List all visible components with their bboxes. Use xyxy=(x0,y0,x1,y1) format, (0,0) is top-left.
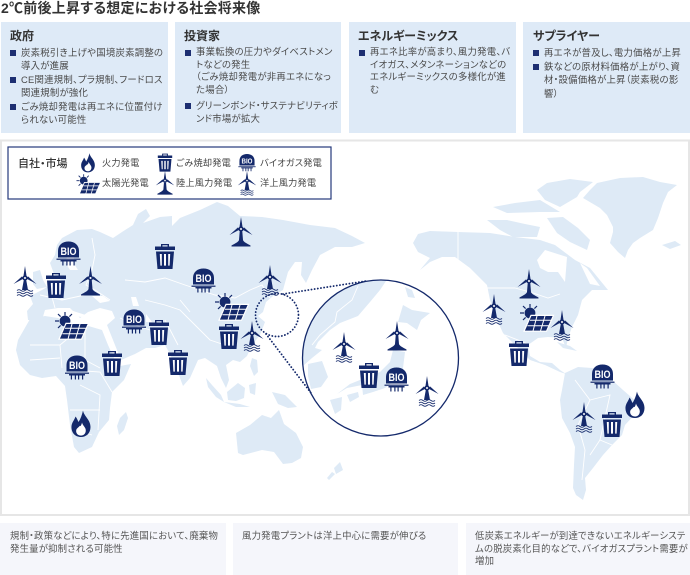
text: waste power xyxy=(21,100,163,127)
icon: waste, China xyxy=(219,324,239,349)
Honshu xyxy=(337,350,405,395)
text: divestment: た場合） xyxy=(196,84,229,95)
map frame xyxy=(1,140,689,515)
New Zealand xyxy=(327,462,343,480)
text: divestment xyxy=(196,46,333,97)
South America xyxy=(560,367,638,500)
Australia xyxy=(236,410,303,464)
text: waste note: 規制・政策などにより、特に先進国において、廃棄物 xyxy=(10,530,218,541)
icon: biogas, West Africa xyxy=(65,356,89,380)
text: biogas note xyxy=(475,530,688,566)
legend: offshore wind: 洋上風力発電 xyxy=(260,177,316,188)
icon: waste, Mexico xyxy=(509,341,529,366)
zoom circle: Japan xyxy=(303,280,430,414)
heading: investors: 投資家 xyxy=(184,29,220,43)
icon: onshore wind, Siberia xyxy=(230,217,252,246)
icon: offshore wind, East China Sea xyxy=(240,321,264,351)
icon: onshore wind, USA xyxy=(518,269,540,298)
text: green bond xyxy=(196,99,338,126)
icon: onshore wind, Japan xyxy=(386,321,408,350)
text: renewable ratio: 再エネ比率が高まり、風力発電、バ xyxy=(370,46,510,57)
Sakhalin xyxy=(405,287,415,298)
icon: offshore wind, northeast Asia xyxy=(258,265,282,295)
text: power price: 再エネが普及し、電力価格が上昇 xyxy=(544,47,681,58)
legend box xyxy=(8,147,331,199)
text: CE regulation: 関連規制が強化 xyxy=(21,87,88,98)
Hokkaido xyxy=(398,305,430,330)
icon: waste, Japan xyxy=(359,363,379,388)
text: waste power: ごみ焼却発電は再エネに位置付け xyxy=(21,101,163,112)
text: biogas note: ムの脱炭素化目的などで、バイオガスプラント需要が xyxy=(475,543,688,554)
legend: biogas: BIO xyxy=(242,156,253,166)
zoom connector: dotted lines xyxy=(266,281,366,393)
map icons xyxy=(14,217,644,437)
text: material price: 材・設備価格が上昇（炭素税の影 xyxy=(544,74,678,85)
icon: onshore wind, east Europe xyxy=(79,266,102,296)
Indonesia / SE Asia islands xyxy=(206,378,224,402)
icon: waste, Russia xyxy=(155,244,175,269)
panel: investors xyxy=(175,22,341,133)
icon: offshore wind, Japan xyxy=(416,376,438,406)
Shikoku xyxy=(347,392,359,402)
text: carbon tax: 導入が進展 xyxy=(21,60,69,71)
icon: biogas, West Africa: BIO xyxy=(69,360,85,372)
icon: biogas, Middle East xyxy=(122,310,146,334)
icon: biogas, central Asia xyxy=(192,268,216,292)
Greenland xyxy=(583,177,677,258)
legend: thermal xyxy=(81,153,140,172)
text: carbon tax xyxy=(21,46,163,73)
icon: waste, East Africa xyxy=(102,351,122,376)
North America xyxy=(413,231,608,374)
heading: energy mix: エネルギーミックス xyxy=(358,29,458,43)
text: divestment: トなどの発生 xyxy=(196,59,250,70)
legend: biogas xyxy=(238,154,322,171)
Korea xyxy=(308,361,328,389)
Cuba xyxy=(557,342,577,351)
legend: onshore wind: 陸上風力発電 xyxy=(176,177,232,188)
text: renewable ratio: イオガス、メタンネーションなどの xyxy=(370,58,506,70)
legend title: 自社・市場 xyxy=(18,156,68,170)
text: biogas note: 低炭素エネルギーが到達できないエネルギーシステ xyxy=(475,530,686,541)
icon: biogas, Scandinavia: BIO xyxy=(60,246,77,258)
text: material price xyxy=(544,60,680,100)
legend: thermal: 火力発電 xyxy=(102,157,140,168)
Arctic islands xyxy=(537,179,593,207)
text: carbon tax: 炭素税引き上げや国境炭素調整の xyxy=(21,47,163,58)
note: waste xyxy=(0,523,226,575)
text: divestment: 事業転換の圧力やダイベストメン xyxy=(196,46,333,57)
icon: biogas, north South America: BIO xyxy=(594,369,611,381)
legend: waste: ごみ焼却発電 xyxy=(176,157,231,168)
icon: solar, USA xyxy=(520,304,554,331)
Iceland xyxy=(662,241,681,249)
legend: biogas: バイオガス発電 xyxy=(260,157,322,168)
title: 2℃前後上昇する想定における社会将来像 xyxy=(1,0,261,16)
legend: solar xyxy=(76,174,149,194)
icon: biogas, central Asia: BIO xyxy=(196,273,212,285)
icon: offshore wind, Peru xyxy=(572,402,596,432)
text: material price: 響） xyxy=(544,88,559,99)
icon: biogas, Japan: BIO xyxy=(388,372,405,384)
text: waste power: られない可能性 xyxy=(21,114,86,125)
mainland Asia xyxy=(303,280,386,366)
country borders xyxy=(30,232,612,480)
text: CE regulation: CE関連規制、プラ規制、フードロス xyxy=(21,74,163,85)
world map panel xyxy=(0,140,690,516)
icon: offshore wind, US east xyxy=(550,310,574,340)
icon: waste, west Europe xyxy=(46,273,66,298)
text: renewable ratio: む xyxy=(370,84,379,94)
text: CE regulation xyxy=(21,73,163,100)
icon: waste, India xyxy=(168,350,188,375)
text: waste note xyxy=(10,530,218,554)
icon: solar, China xyxy=(215,293,248,320)
Kyushu xyxy=(330,397,342,414)
text: divestment: （ごみ焼却発電が非再エネになっ xyxy=(196,71,331,82)
Africa xyxy=(16,316,131,453)
icon: thermal, southern Africa xyxy=(71,410,90,437)
panel: energy mix xyxy=(349,22,516,133)
icon: offshore wind, US west xyxy=(482,294,506,324)
zoom source: dotted circle xyxy=(256,294,298,336)
white seas xyxy=(50,250,600,322)
icon: thermal, Brazil xyxy=(625,392,644,418)
icon: offshore wind, Korea xyxy=(332,332,356,362)
text: green bond: ンド市場が拡大 xyxy=(196,113,260,124)
zoom circle outline xyxy=(302,280,458,436)
icon: biogas, Scandinavia xyxy=(56,242,80,266)
text: wind note: 風力発電プラントは洋上中心に需要が伸びる xyxy=(242,530,426,541)
note: biogas xyxy=(466,523,690,575)
icon: biogas, north South America xyxy=(590,364,614,388)
note: wind xyxy=(233,523,458,575)
legend: waste xyxy=(158,154,231,172)
panel: government xyxy=(1,22,168,133)
legend: onshore wind xyxy=(156,171,232,195)
Madagascar xyxy=(117,412,128,435)
world map land xyxy=(16,177,681,500)
icon: waste, Brazil xyxy=(602,412,622,437)
icon: biogas, Japan xyxy=(384,368,408,392)
UK xyxy=(33,270,47,289)
heading: government: 政府 xyxy=(10,29,34,43)
legend: offshore wind xyxy=(238,171,316,195)
icon: waste, Middle East xyxy=(149,320,169,345)
text: waste note: 発生量が抑制される可能性 xyxy=(10,543,123,554)
text: renewable ratio: エネルギーミックスの多様化が進 xyxy=(370,71,506,82)
text: material price: 鉄などの原材料価格が上がり、資 xyxy=(544,61,680,72)
panel: suppliers xyxy=(523,22,690,133)
text: biogas note: 増加 xyxy=(475,555,494,566)
icon: solar, North Africa xyxy=(55,312,88,339)
text: renewable ratio xyxy=(370,46,510,96)
icon: biogas, Middle East: BIO xyxy=(126,314,142,326)
heading: suppliers: サプライヤー xyxy=(533,29,600,43)
legend: solar: 太陽光発電 xyxy=(102,177,149,188)
Eurasia xyxy=(27,202,365,388)
icon: offshore wind, UK xyxy=(14,266,36,296)
text: green bond: グリーンボンド・サステナビリティボ xyxy=(196,100,338,111)
